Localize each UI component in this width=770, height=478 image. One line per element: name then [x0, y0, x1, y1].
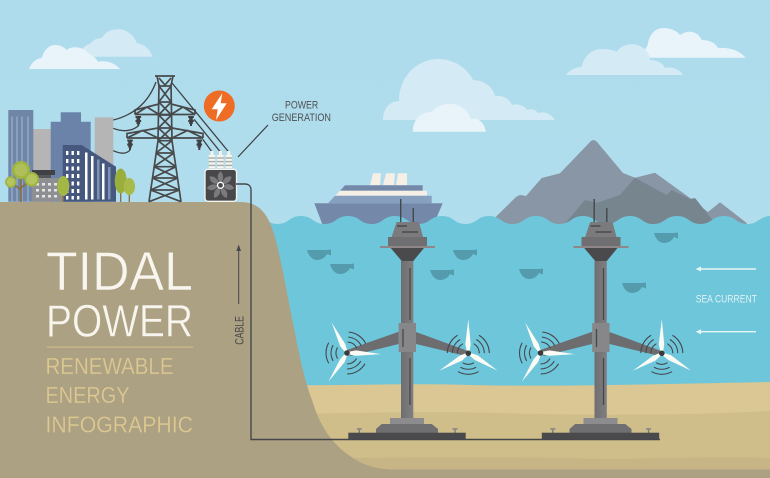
mountains: [495, 140, 747, 230]
tidal turbine 2: [520, 199, 693, 440]
cloud group: top right: [566, 28, 746, 75]
power generation label: [272, 99, 331, 124]
arms: [347, 332, 399, 356]
left rotor: [326, 322, 381, 383]
underwater cable: [236, 184, 660, 440]
subtitle: INFOGRAPHIC: [46, 412, 193, 438]
low grey building: [32, 170, 63, 202]
title: tidal power: [46, 240, 193, 347]
title: tidal power: TIDAL: [46, 240, 193, 302]
power generation label: GENERATION: [272, 112, 331, 124]
fish: [307, 232, 678, 293]
trees: [5, 161, 135, 202]
column: [401, 261, 413, 419]
cruise ship: [314, 173, 443, 226]
sea bed sand: [280, 382, 770, 478]
collar: [399, 323, 416, 352]
right rotor: [438, 319, 499, 374]
power generation leader line: [238, 125, 268, 157]
power generation label: POWER: [285, 99, 318, 111]
icon: lightning bolt badge: [204, 90, 235, 122]
cloud group: centre: [383, 59, 555, 132]
generator with insulators and fan: [205, 151, 236, 201]
sea water: [254, 216, 770, 400]
base: [390, 418, 424, 424]
fan blades: [206, 171, 235, 199]
subtitle: RENEWABLE: [46, 353, 174, 379]
cloud group: top left: [29, 29, 152, 69]
title: tidal power: POWER: [46, 296, 193, 347]
power lines: [113, 82, 228, 153]
subtitle: ENERGY: [46, 382, 130, 408]
subtitle: [46, 353, 193, 438]
antennas: [401, 199, 413, 223]
title divider: [47, 346, 193, 348]
cable label: CABLE: [234, 316, 246, 345]
tower head: [392, 222, 423, 237]
city skyline: [5, 110, 135, 202]
cable direction arrow: [236, 244, 241, 304]
insulators: [127, 116, 202, 150]
dark office building: [63, 145, 116, 202]
power pylon: [127, 76, 203, 202]
tidal turbine 1: [326, 199, 499, 440]
sea current arrows: [696, 266, 756, 334]
land: [0, 202, 770, 478]
